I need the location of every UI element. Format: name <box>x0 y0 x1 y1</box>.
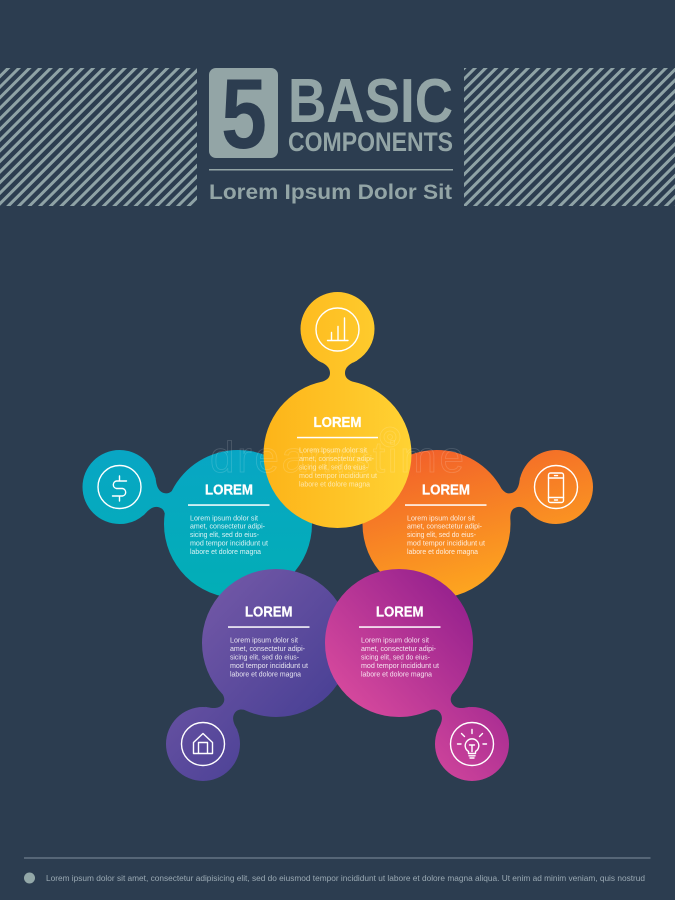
body text <box>299 446 378 488</box>
body text: Lorem ipsum dolor sit <box>361 636 430 645</box>
body text: amet, consectetur adipi- <box>407 522 482 531</box>
body text <box>407 513 486 556</box>
icon: dollar <box>98 466 141 508</box>
icon: house <box>182 722 224 766</box>
body text: labore et dolore magna <box>190 547 262 556</box>
heading: LOREM <box>422 482 470 498</box>
title: basic: BASIC <box>288 67 453 136</box>
heading rule <box>405 504 486 506</box>
body text: sicing elit, sed do eius- <box>230 652 299 662</box>
orange blob <box>362 450 593 598</box>
panel: magenta component <box>324 568 510 782</box>
heading rule <box>228 626 310 628</box>
body text: labore et dolore magna <box>407 547 479 556</box>
footer rule <box>24 858 650 859</box>
body text: mod tempor incididunt ut <box>230 661 309 670</box>
title: components: COMPONENTS <box>288 127 453 157</box>
heading rule <box>297 437 378 438</box>
purple blob <box>165 568 351 782</box>
footer <box>24 858 650 884</box>
body text: Lorem ipsum dolor sit <box>230 636 299 645</box>
footer text: Lorem ipsum dolor sit amet, consectetur adipisicing elit, sed do eiusmod tempor incididunt ut labore et dolore magna aliqua. Ut enim ad minim veniam, quis nostrud <box>46 873 645 883</box>
number badge: 5 <box>221 58 267 169</box>
panel: teal component <box>82 450 312 598</box>
body text: labore et dolore magna <box>361 669 433 678</box>
body text: sicing elit, sed do eius- <box>299 462 368 472</box>
heading: LOREM <box>245 605 292 621</box>
teal blob <box>82 450 312 598</box>
header stripes: left <box>0 68 197 206</box>
body text <box>230 636 309 678</box>
magenta blob <box>324 568 510 782</box>
body text: mod tempor incididunt ut <box>190 538 269 548</box>
body text: labore et dolore magna <box>230 669 302 678</box>
body text: amet, consectetur adipi- <box>230 644 305 653</box>
icon: light bulb <box>450 722 494 766</box>
title rule <box>209 169 453 170</box>
body text: Lorem ipsum dolor sit <box>190 513 259 522</box>
title block <box>209 58 453 204</box>
panel: yellow component <box>263 291 412 529</box>
body text: sicing elit, sed do eius- <box>361 652 430 662</box>
body text: mod tempor incididunt ut <box>407 538 486 548</box>
heading rule <box>359 626 440 628</box>
panel: orange component <box>362 450 593 598</box>
body text: amet, consectetur adipi- <box>361 644 436 653</box>
body text: mod tempor incididunt ut <box>299 471 378 480</box>
footer dot <box>24 872 35 884</box>
header stripes: right <box>464 68 675 206</box>
heading: LOREM <box>314 415 362 431</box>
watermark: dreamstime <box>210 433 464 482</box>
icon: phone <box>534 466 578 508</box>
body text: sicing elit, sed do eius- <box>407 530 476 539</box>
body text: amet, consectetur adipi- <box>299 454 374 463</box>
heading: LOREM <box>205 482 253 498</box>
body text: sicing elit, sed do eius- <box>190 530 259 539</box>
icon: bar chart <box>316 308 359 351</box>
yellow blob <box>263 291 412 529</box>
heading: LOREM <box>376 605 424 621</box>
body text: Lorem ipsum dolor sit <box>407 513 476 522</box>
heading rule <box>188 504 270 506</box>
panel: purple component <box>165 568 351 782</box>
body text: labore et dolore magna <box>299 479 371 488</box>
body text: amet, consectetur adipi- <box>190 522 265 531</box>
body text <box>361 636 440 678</box>
body text <box>190 513 269 556</box>
body text: mod tempor incididunt ut <box>361 661 440 670</box>
body text: Lorem ipsum dolor sit <box>299 446 368 455</box>
subtitle: Lorem Ipsum Dolor Sit <box>209 180 452 204</box>
